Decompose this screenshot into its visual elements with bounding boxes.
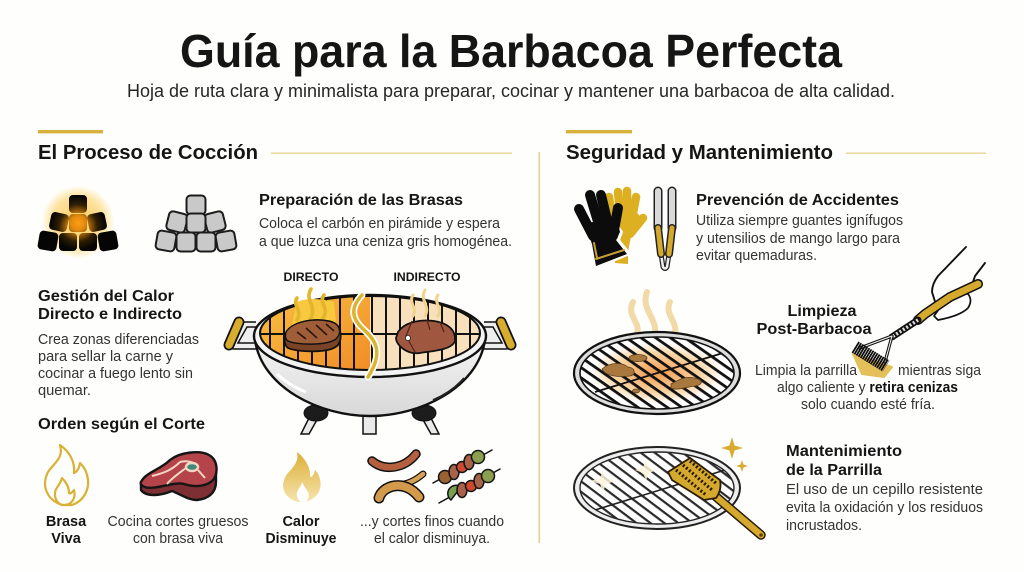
caption: cortes finos: ...y cortes finos cuando <box>360 514 504 530</box>
text block: limpieza post-barbacoa: Limpia la parrilla <box>755 363 858 379</box>
sparkles on grate <box>590 460 657 492</box>
icon: hand with grill brush <box>853 247 985 377</box>
grate <box>261 297 479 369</box>
caption: cortes gruesos: Cocina cortes gruesos <box>108 514 248 530</box>
text block: preparación de las brasas: a que luzca una ceniza gris homogénea. <box>259 234 512 250</box>
text block: mantenimiento de la parrilla: incrustados. <box>786 518 862 534</box>
label: calor disminuye: Calor <box>282 514 320 530</box>
text block: gestión del calor: cocinar a fuego lento sin <box>38 366 193 382</box>
steak <box>285 320 341 351</box>
label: brasa viva: Brasa <box>46 514 87 530</box>
icon: sausages and skewers <box>372 450 500 503</box>
text block: mantenimiento de la parrilla: El uso de un cepillo resistente <box>786 482 983 498</box>
icon: clean grill with brush <box>570 437 763 537</box>
caption: cortes finos <box>360 514 504 547</box>
legs <box>301 405 439 434</box>
diagram: kettle grill direct and indirect zones <box>229 270 511 434</box>
panel: seguridad y mantenimiento <box>566 130 986 537</box>
text block: prevención de accidentes: Prevención de Accidentes <box>696 192 899 209</box>
label: brasa viva <box>46 514 87 547</box>
icon: thick steak <box>141 452 217 500</box>
text block: gestión del calor <box>38 288 199 399</box>
panel: el proceso de cocción <box>37 130 512 547</box>
heading: el proceso de cocción <box>38 130 512 164</box>
text block: limpieza post-barbacoa: mientras siga <box>898 363 982 379</box>
label: calor disminuye: Disminuye <box>266 531 336 547</box>
subtitle: Hoja de ruta clara y minimalista para preparar, cocinar y mantener una barbacoa de alta calidad. <box>127 81 895 101</box>
heading: seguridad y mantenimiento: Seguridad y Mantenimiento <box>566 142 833 164</box>
label: indirecto: INDIRECTO <box>394 270 460 284</box>
text block: preparación de las brasas: Coloca el carbón en pirámide y espera <box>259 216 501 232</box>
icon: dirty hot grill grate <box>570 292 745 420</box>
roast <box>396 320 455 353</box>
label: calor disminuye <box>266 514 336 547</box>
flames direct zone <box>292 289 336 326</box>
caption: cortes finos: el calor disminuya. <box>374 531 490 547</box>
flames indirect zone <box>412 290 439 316</box>
heading: el proceso de cocción: El Proceso de Cocción <box>38 142 258 164</box>
text block: prevención de accidentes: Utiliza siempre guantes ignífugos <box>696 213 903 229</box>
hand <box>932 247 985 308</box>
label: brasa viva: Viva <box>51 531 82 547</box>
text block: mantenimiento de la parrilla: de la Parrilla <box>786 462 882 479</box>
bowl <box>255 340 485 416</box>
heading: orden según el corte: Orden según el Corte <box>38 416 205 433</box>
icon: ashed coal pyramid <box>155 196 237 252</box>
text block: limpieza post-barbacoa: algo caliente y retira cenizas <box>777 380 958 396</box>
text block: mantenimiento de la parrilla: Mantenimiento <box>786 443 902 460</box>
handles <box>229 322 511 349</box>
label: directo: DIRECTO <box>284 270 338 284</box>
text block: prevención de accidentes: evitar quemaduras. <box>696 248 817 264</box>
icon: heat-resistant gloves <box>579 191 643 268</box>
text block: limpieza post-barbacoa: Post-Barbacoa <box>756 321 872 338</box>
icon: glowing coal pyramid <box>37 186 119 258</box>
zone divider <box>354 295 377 377</box>
text block: limpieza post-barbacoa: solo cuando esté fría. <box>801 397 935 413</box>
text block: mantenimiento de la parrilla <box>786 443 983 534</box>
text block: gestión del calor: Crea zonas diferenciadas <box>38 332 199 348</box>
caption: cortes gruesos: con brasa viva <box>133 531 224 547</box>
heading: seguridad y mantenimiento <box>566 130 986 164</box>
text block: gestión del calor: Directo e Indirecto <box>38 306 182 323</box>
brush head <box>853 354 892 377</box>
twisted shaft <box>892 320 918 337</box>
sparkles <box>721 437 743 459</box>
brush <box>668 458 763 537</box>
icon: live ember flame <box>45 445 88 505</box>
text block: preparación de las brasas <box>259 192 512 250</box>
icon: long-handled tongs <box>658 191 672 268</box>
text block: gestión del calor: Gestión del Calor <box>38 288 174 305</box>
caption: cortes gruesos <box>108 514 248 547</box>
text block: prevención de accidentes: y utensilios de mango largo para <box>696 231 901 247</box>
text block: limpieza post-barbacoa: Limpieza <box>788 303 857 320</box>
title: Guía para la Barbacoa Perfecta <box>180 25 842 77</box>
rim <box>254 295 486 377</box>
text block: limpieza post-barbacoa <box>755 303 982 413</box>
text block: gestión del calor: para sellar la carne y <box>38 349 174 365</box>
text block: gestión del calor: quemar. <box>38 383 91 399</box>
icon: diminishing heat flame <box>283 452 321 502</box>
handle <box>918 284 978 320</box>
text block: prevención de accidentes <box>696 192 903 264</box>
text block: preparación de las brasas: Preparación de las Brasas <box>259 192 463 209</box>
text block: mantenimiento de la parrilla: evita la oxidación y los residuos <box>786 500 983 516</box>
